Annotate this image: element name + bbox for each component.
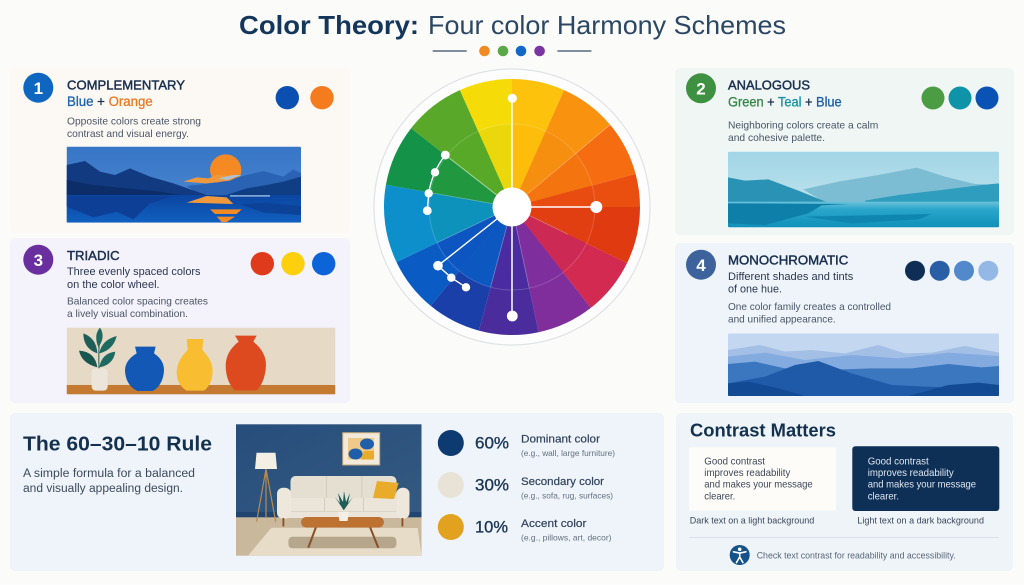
description	[23, 468, 195, 495]
swatches: red, yellow, blue	[251, 252, 335, 275]
badge 2: 2	[696, 80, 706, 99]
subtitle: blue + orange: Blue + Orange	[67, 94, 153, 109]
badge 1	[23, 73, 53, 103]
icon: accessibility figure	[730, 545, 750, 565]
color wheel	[374, 69, 650, 345]
definition: on the color wheel.	[67, 279, 160, 291]
badge 4	[686, 250, 716, 280]
legend: 30 percent secondary: 30%	[475, 476, 509, 494]
harmony marker: blue shades	[433, 207, 512, 291]
potted plant	[335, 491, 353, 521]
swatches: green, teal, blue	[922, 86, 998, 110]
heading: complementary: COMPLEMENTARY	[67, 77, 185, 92]
illustration: sunset lake	[67, 147, 301, 223]
description: Balanced color spacing creates	[67, 295, 208, 307]
heading: triadic: TRIADIC	[67, 248, 120, 263]
coffee table	[301, 517, 384, 548]
harmony marker: complementary axis	[507, 94, 602, 321]
definition: Three evenly spaced colors	[67, 266, 201, 278]
legend: 10 percent accent: (e.g., pillows, art, decor)	[521, 532, 612, 542]
harmony marker: analogous arc	[423, 151, 512, 215]
illustration: living room	[236, 424, 422, 556]
badge 1: 1	[34, 79, 43, 98]
definition	[728, 271, 854, 296]
sofa	[277, 476, 410, 526]
example: dark text on light: Good contrast	[704, 455, 765, 467]
example: dark text on light: and makes your message	[704, 479, 813, 491]
legend: 30 percent secondary: Secondary color	[521, 476, 604, 488]
wheel hub	[492, 188, 532, 226]
description	[67, 295, 208, 320]
legend: 60 percent dominant: Dominant color	[521, 434, 600, 446]
title	[239, 10, 786, 40]
panel: contrast matters	[676, 413, 1013, 571]
legend: 60 percent dominant: (e.g., wall, large furniture)	[521, 448, 615, 458]
legend: 60 percent dominant: 60%	[475, 434, 509, 452]
legend: 30 percent secondary	[438, 472, 613, 500]
description	[728, 119, 879, 144]
floor lamp	[255, 453, 277, 522]
example: light text on dark: and makes your message	[868, 479, 976, 491]
example: light text on dark: clearer.	[868, 491, 899, 503]
title divider with color dots	[433, 46, 591, 56]
subtitle: green + teal + blue: Green + Teal + Blue	[728, 95, 842, 110]
swatches: four blue tints	[905, 261, 998, 281]
description: Opposite colors create strong	[67, 116, 201, 128]
legend: 60 percent dominant	[438, 430, 615, 458]
outer ring	[374, 69, 650, 345]
heading: analogous: ANALOGOUS	[728, 77, 810, 92]
wall art	[343, 433, 380, 465]
wheel inner wedges	[429, 124, 595, 290]
swatches: blue, orange	[276, 86, 334, 109]
legend: 30 percent secondary: (e.g., sofa, rug, surfaces)	[521, 490, 613, 500]
badge 2	[686, 73, 716, 103]
description: Neighboring colors create a calm	[728, 119, 879, 131]
panel: analogous	[675, 68, 1014, 235]
badge 4: 4	[696, 256, 706, 275]
panel: 60-30-10 rule	[10, 413, 664, 571]
example: light text on dark: Good contrast	[868, 455, 929, 467]
description: and visually appealing design.	[23, 483, 183, 495]
caption: dark on light: Dark text on a light background	[690, 515, 814, 526]
description	[728, 301, 891, 326]
panel: complementary	[23, 72, 334, 223]
legend: 10 percent accent: 10%	[475, 518, 508, 536]
example: light text on dark	[852, 446, 999, 511]
illustration: blue mountain layers	[728, 333, 999, 396]
accessibility note: Check text contrast for readability and accessibility.	[757, 550, 956, 560]
definition: Different shades and tints	[728, 271, 854, 283]
badge 3	[23, 245, 53, 275]
description: a lively visual combination.	[67, 308, 188, 320]
title: Four color Harmony Schemes	[428, 10, 786, 40]
legend: 10 percent accent	[438, 514, 612, 542]
definition	[67, 266, 201, 291]
example: light text on dark: improves readability	[868, 467, 954, 479]
definition: of one hue.	[728, 284, 782, 296]
description	[67, 116, 201, 140]
wheel outer wedges	[384, 79, 640, 335]
example: dark text on light	[689, 447, 836, 511]
title: Color Theory:	[239, 10, 419, 40]
description: One color family creates a controlled	[728, 301, 891, 313]
heading: monochromatic: MONOCHROMATIC	[728, 253, 848, 268]
caption: light on dark: Light text on a dark background	[857, 515, 984, 526]
heading: the 60-30-10 rule: The 60–30–10 Rule	[23, 433, 212, 455]
panel: monochromatic	[675, 243, 1014, 403]
legend: 10 percent accent: Accent color	[521, 518, 587, 530]
example: dark text on light: improves readability	[704, 467, 791, 479]
illustration: vases on a shelf	[67, 328, 335, 394]
illustration: teal lake	[728, 152, 999, 227]
description: and unified appearance.	[728, 314, 836, 326]
panel: triadic	[10, 238, 350, 403]
description: A simple formula for a balanced	[23, 468, 195, 480]
badge 3: 3	[34, 251, 43, 270]
example: dark text on light: clearer.	[704, 491, 735, 503]
description: and cohesive palette.	[728, 132, 825, 144]
description: contrast and visual energy.	[67, 128, 189, 140]
heading: contrast matters: Contrast Matters	[690, 420, 836, 441]
